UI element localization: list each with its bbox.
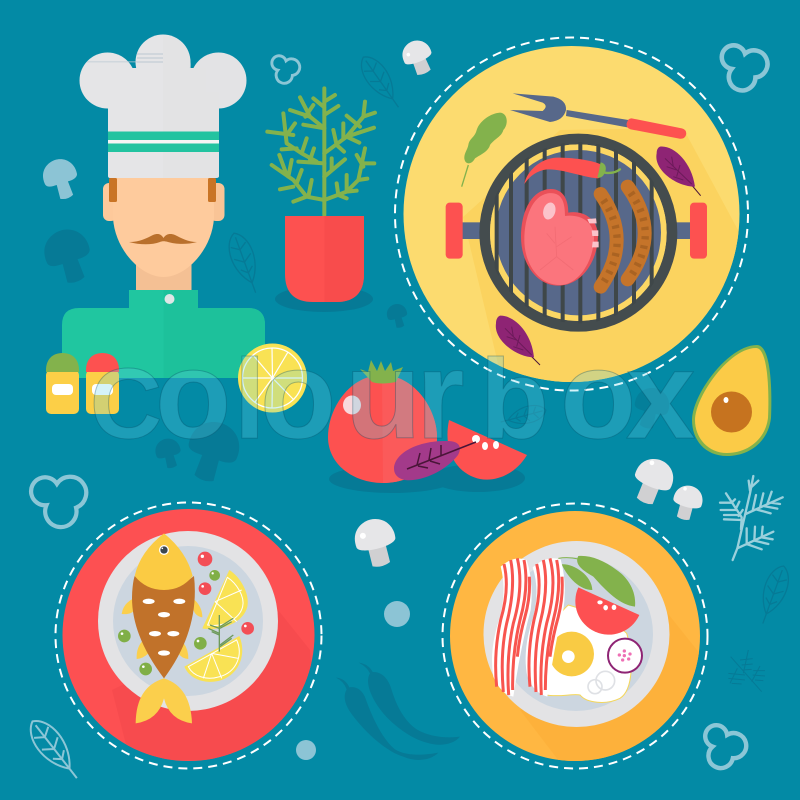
tomato shade [382,375,437,483]
disc shadow [558,652,699,761]
pot shade [324,216,364,302]
chef hat [80,34,246,178]
hat stripes [108,132,219,152]
dashed ring [395,38,748,390]
grill body [485,130,672,337]
watermark text: b [480,336,549,462]
chef sideburns [109,178,216,202]
tomato wedge [575,587,639,635]
icon: dark mushroom behind x [629,384,673,432]
icon: dark herb sprig [728,650,765,692]
bacon left [492,558,532,697]
fork [510,93,686,139]
icon: lemon slice [238,344,307,412]
yolk [549,632,594,676]
watermark text: o [560,326,636,465]
icon: trefoil outline left [28,467,94,533]
icon: light dot center [384,601,410,627]
yellow disc [404,46,740,382]
salt shaker green [46,353,79,414]
hat smudge [87,53,163,63]
plant branches [267,88,375,215]
watermark text: C [90,348,162,460]
jacket seam shade [164,290,265,378]
pit [711,392,752,432]
icon: light dot bottom [296,740,316,760]
icon: white mushroom right small [669,482,706,523]
steak [521,189,599,286]
skin [692,345,771,456]
lemon wedge top [202,570,248,629]
tomato crown [360,360,403,384]
disc shadow [126,662,312,760]
tail [136,678,192,723]
sausage left [601,194,617,287]
salt shaker red [86,353,119,414]
icon: dark mushroom small right of plant [385,302,410,330]
icon: trefoil outline bottom right [700,723,749,772]
chef ear left [103,183,117,221]
chef jacket [62,290,265,378]
icon: white mushroom top [398,36,438,79]
peas and berries [118,552,254,675]
icon: white mushroom right large [626,453,679,510]
icon: dark mushroom large under watermark [179,415,246,488]
jacket button [164,294,174,304]
chef moustache [129,234,197,244]
purple leaf top right [656,147,701,196]
long shadow [463,128,738,382]
icon: dark chillies [336,663,460,760]
icon: trefoil outline top right [722,45,767,90]
icon: light leaf outline bottom left [22,714,87,786]
red disc [62,509,314,761]
dashed ring [56,502,322,768]
orange disc [450,511,700,761]
plant shadow [275,286,373,312]
watermark text: o [260,326,336,465]
shadow [329,464,525,493]
purple leaf [394,441,476,480]
greens [553,556,635,607]
plant pot [285,216,364,302]
icon: dark leaf outline under watermark [498,402,548,430]
plate [484,541,670,727]
body [132,576,195,678]
radish slice [608,639,642,673]
flesh [695,348,768,453]
icon: white mushroom center [351,515,401,571]
plant [267,88,375,312]
plate [98,531,278,711]
grill handles [446,203,707,259]
icon: trefoil outline top [272,56,300,83]
tomato group [328,360,527,493]
dill [208,615,233,652]
egg plate [442,504,720,768]
icon: dark mushroom left [39,224,98,289]
chili [524,158,620,184]
icon: light mushroom left [39,155,83,204]
sausage right [628,187,645,279]
chef face [113,178,214,277]
lemon wedge bottom [184,636,242,682]
bacon right [526,558,565,697]
fish plate [56,502,322,768]
fish [122,533,202,723]
pit highlight [724,397,728,403]
chef ear right [210,183,224,221]
watermark text: x [626,326,696,465]
grill circle [395,38,760,400]
dashed ring [442,504,708,768]
egg rings [588,671,615,694]
fins [122,598,202,659]
chef neck [136,255,192,291]
watermark text: u [345,326,421,465]
tomato slice [447,420,527,480]
icon: dark leaf outline by chef [223,229,266,297]
icon: dark leaf outline top [354,51,407,113]
eye [159,545,169,555]
chef [62,34,265,378]
icon: dark mushroom small under watermark [153,436,185,471]
watermark text: l [234,336,265,462]
watermark text: o [155,326,231,465]
green leaf [462,113,507,187]
icon: light herb sprig [720,476,783,560]
watermark text: r [416,326,465,465]
egg white [546,605,631,702]
tomato highlight [343,396,361,414]
purple leaf bottom left [496,316,540,365]
spots [143,599,185,656]
big tomato [328,375,437,483]
avocado [692,345,771,456]
head [135,533,193,590]
icon: dark leaf outline right [753,562,794,627]
